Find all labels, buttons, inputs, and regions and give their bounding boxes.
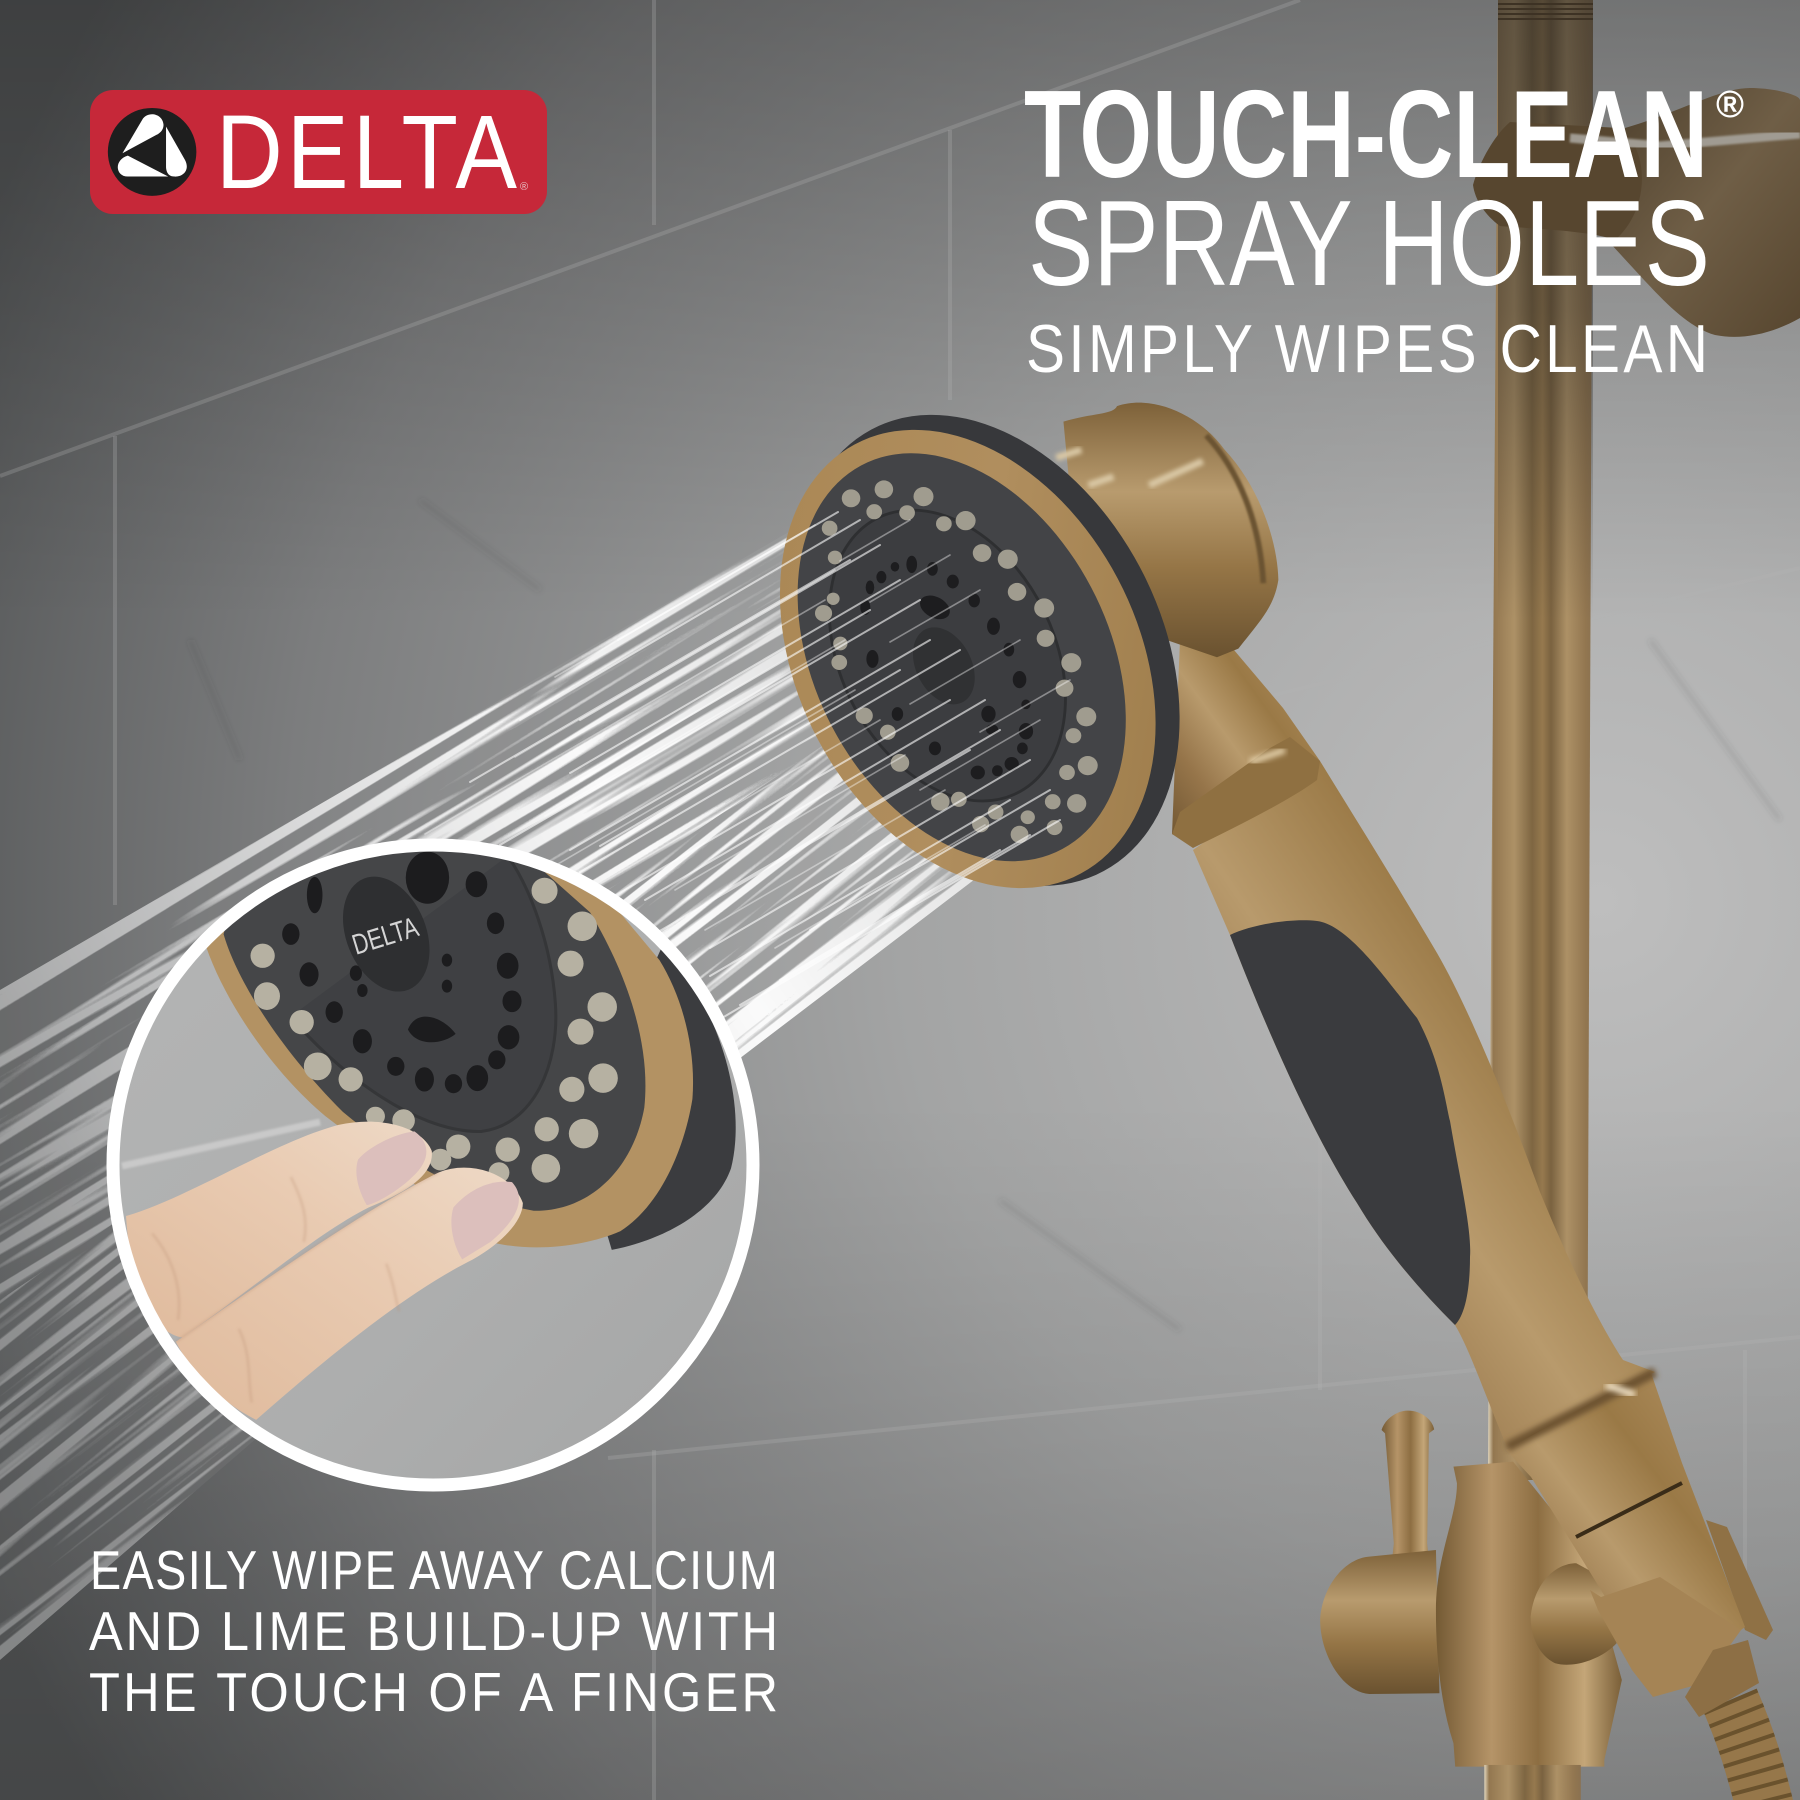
subtitle: SIMPLY WIPES CLEAN	[1026, 312, 1708, 387]
collar highlight	[1250, 750, 1285, 762]
inset center button	[343, 876, 430, 992]
handle end highlight	[1606, 1385, 1635, 1395]
logo emblem	[108, 108, 196, 196]
mount arm	[1531, 1563, 1617, 1665]
inset holes	[282, 852, 522, 1093]
mount body	[1436, 1462, 1622, 1767]
wall bracket flange	[1607, 88, 1800, 337]
handle end band	[1507, 1372, 1655, 1447]
nozzles	[815, 480, 1098, 843]
lower fingernail	[451, 1182, 519, 1259]
rubber grip	[1230, 920, 1470, 1325]
slide rail	[1473, 0, 1800, 1480]
lower bracket	[1590, 1577, 1741, 1697]
caption	[89, 1539, 778, 1723]
caption: EASILY WIPE AWAY CALCIUM	[90, 1539, 778, 1601]
wall bracket clasp	[1473, 122, 1642, 240]
logo wordmark: DELTA	[216, 92, 517, 210]
inset logo text: DELTA	[349, 911, 423, 962]
holder sleeve and clip	[1506, 1370, 1773, 1717]
inset spray face	[224, 843, 645, 1211]
cylinder highlights	[1056, 450, 1203, 485]
inset inner ring	[291, 856, 556, 1131]
lower finger	[176, 1168, 523, 1420]
neck	[1172, 640, 1320, 845]
logo registered mark: ®	[520, 181, 528, 193]
cylinder cap edge	[1206, 435, 1263, 583]
lever base knob	[1320, 1550, 1439, 1694]
shower head	[707, 355, 1278, 947]
lower pipe	[1484, 1765, 1581, 1800]
inset callout circle	[113, 839, 753, 1485]
water jets in front of shower head	[425, 512, 1070, 1025]
inset wall joint	[122, 1122, 320, 1166]
inset nozzles	[250, 878, 618, 1183]
flexible hose	[1730, 1700, 1768, 1800]
diverter mount and lever	[1320, 1411, 1622, 1800]
inset brass ring	[206, 839, 693, 1247]
center button	[901, 618, 987, 714]
sleeve tube	[1506, 1370, 1745, 1690]
inner face ring	[783, 473, 1112, 838]
hand shower handle	[1172, 640, 1655, 1447]
collar	[1172, 737, 1320, 848]
rear body cylinder	[1063, 403, 1278, 657]
rail top knurl	[1498, 4, 1593, 19]
handle body	[1193, 761, 1655, 1447]
lever handle	[1382, 1411, 1434, 1560]
finger creases	[152, 1173, 438, 1402]
sleeve groove	[1576, 1483, 1682, 1537]
title registered mark: ®	[1716, 84, 1744, 126]
brass back rim	[753, 363, 1246, 921]
logo: Delta	[90, 90, 547, 214]
caption: THE TOUCH OF A FINGER	[89, 1662, 778, 1723]
upper fingernail	[356, 1131, 426, 1205]
spray mist haze	[0, 508, 1000, 1660]
upper finger	[126, 1122, 432, 1337]
inset gasket	[608, 950, 736, 1250]
hose nut	[1685, 1640, 1759, 1717]
caption: AND LIME BUILD-UP WITH	[89, 1601, 778, 1662]
black gasket	[720, 355, 1255, 946]
spray holes	[860, 556, 1033, 779]
bracket highlight	[1570, 134, 1800, 146]
brass face ring	[707, 371, 1229, 947]
inset white border	[113, 845, 753, 1485]
dark spray face	[733, 402, 1190, 912]
water spray streaks	[0, 537, 973, 1660]
rear clip	[1706, 1520, 1773, 1640]
